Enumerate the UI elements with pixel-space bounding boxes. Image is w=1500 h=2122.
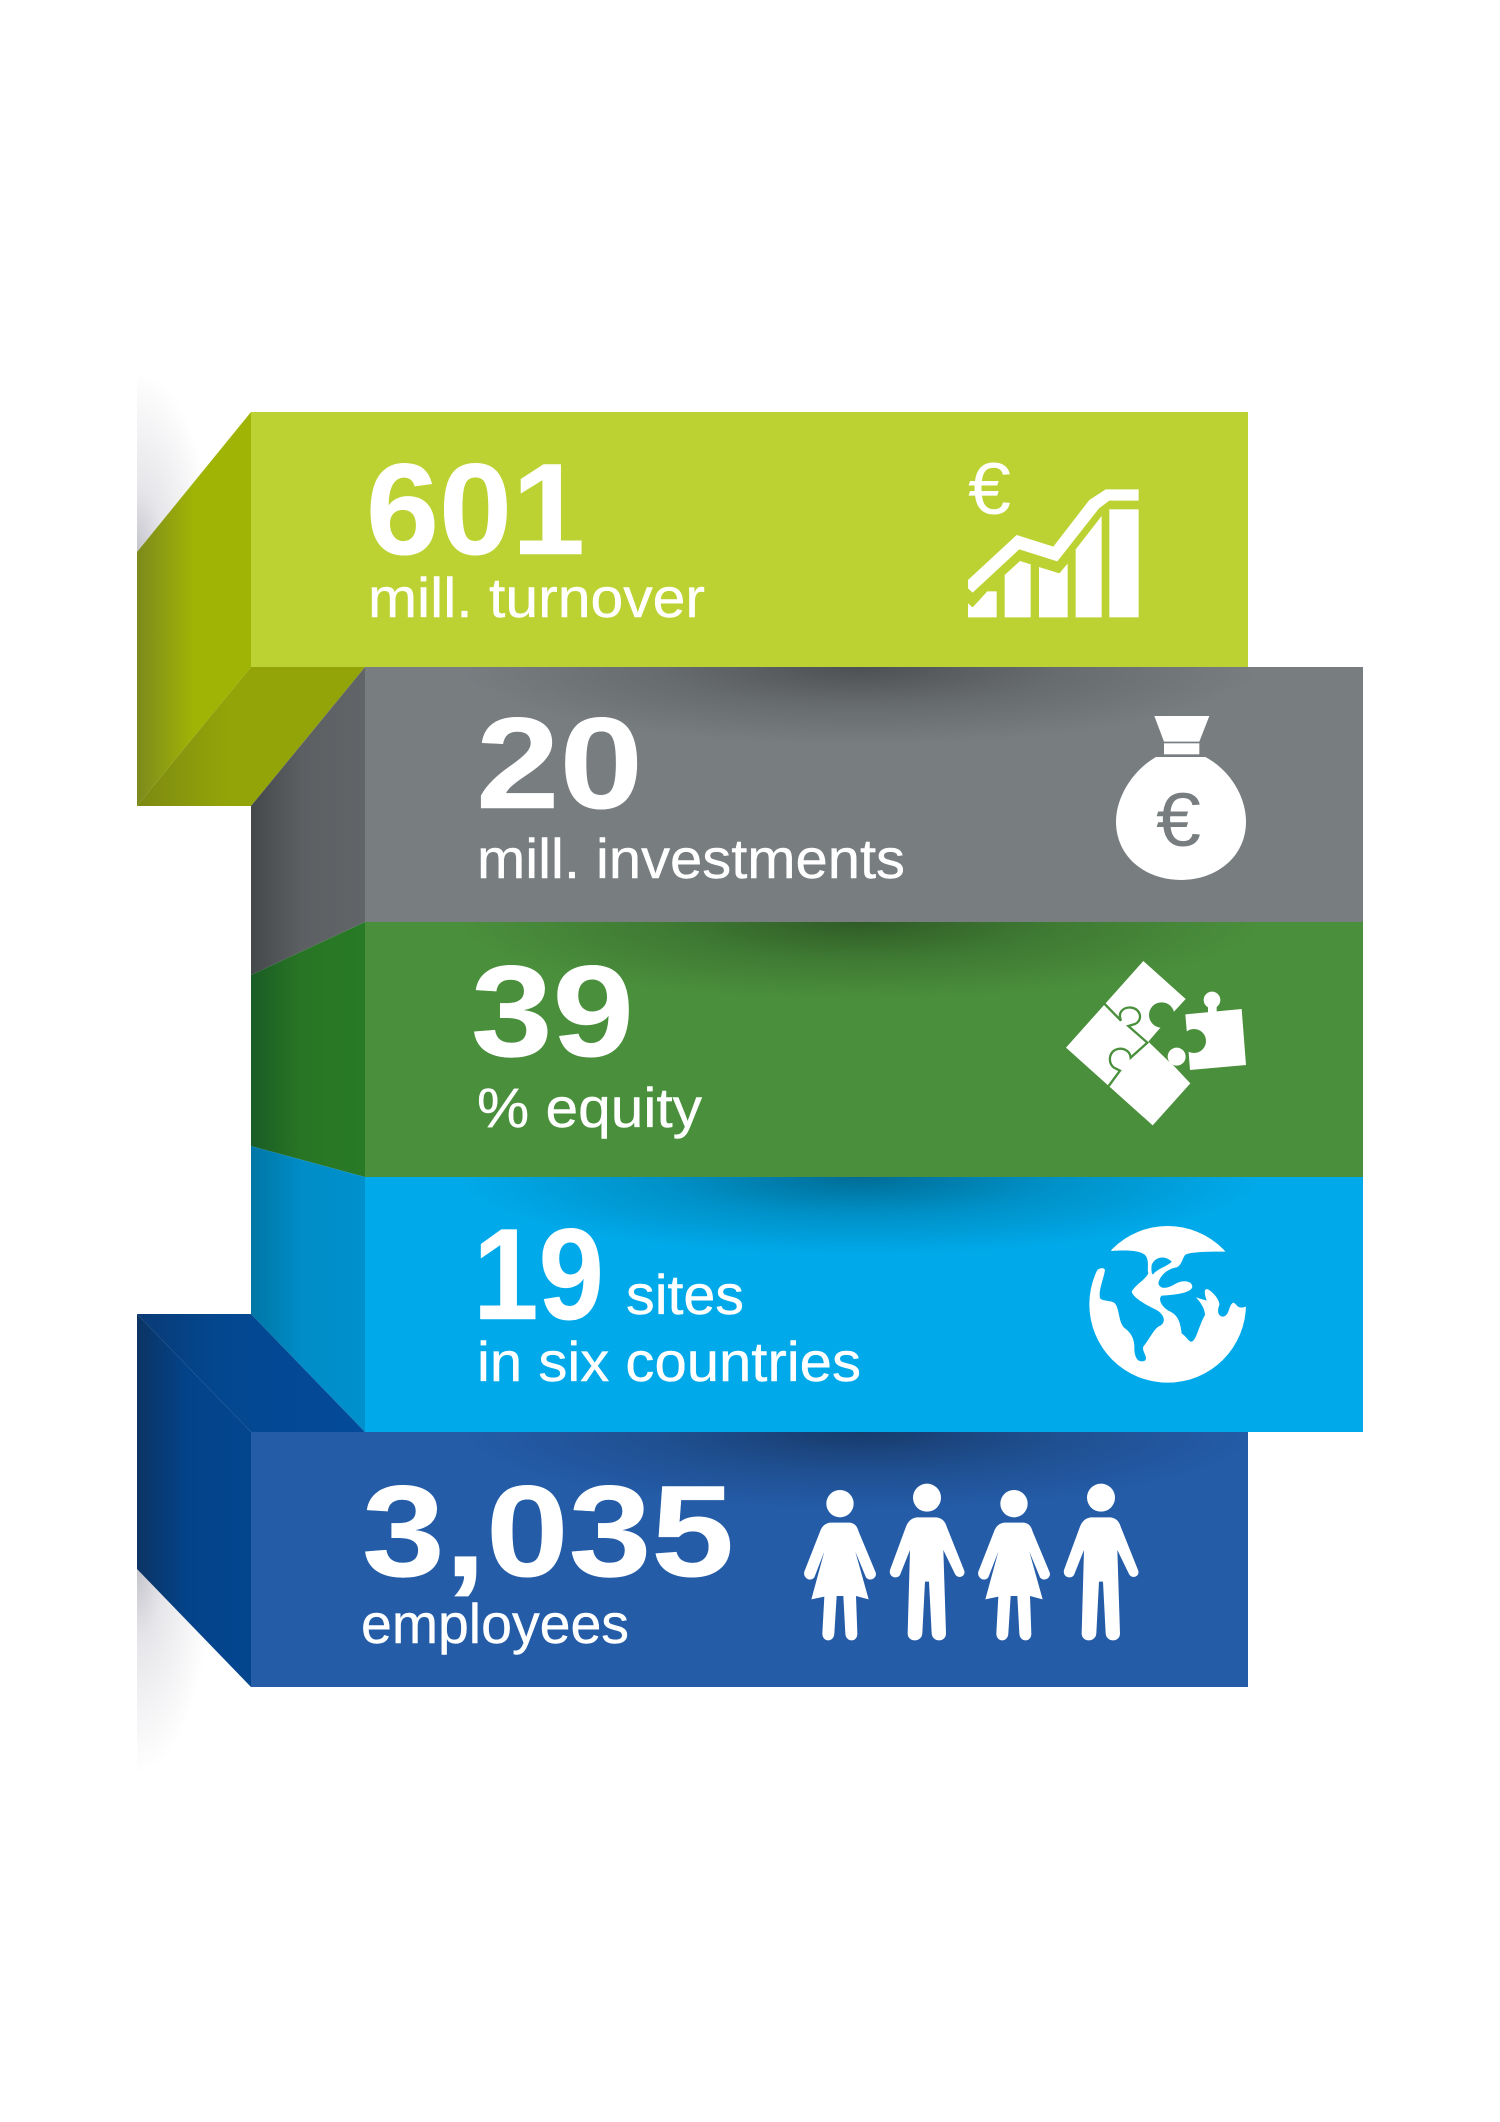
- number: 3,035: 3,035: [362, 1458, 734, 1604]
- number: 39: 39: [471, 938, 634, 1084]
- panel: investments: [251, 667, 1363, 975]
- icon: money bag: €: [1156, 778, 1201, 863]
- lime front face: [251, 412, 1248, 667]
- gray top shadow: [460, 667, 1260, 745]
- navy front face: [251, 1432, 1248, 1687]
- icon: puzzle pieces: [1066, 961, 1246, 1125]
- panel: sites: [251, 1146, 1363, 1432]
- green front face: [365, 922, 1363, 1177]
- panel: equity: [251, 922, 1363, 1177]
- label: in six countries: in six countries: [477, 1330, 861, 1393]
- label: mill. investments: mill. investments: [477, 827, 905, 890]
- number: 20: 20: [476, 690, 643, 836]
- number: 19: 19: [473, 1201, 604, 1347]
- icon: rising chart with euro: [968, 449, 1139, 617]
- gray front face: [365, 667, 1363, 922]
- label: sites: sites: [626, 1263, 744, 1326]
- blue left side face: [251, 1146, 365, 1432]
- icon: rising chart with euro: €: [968, 449, 1011, 530]
- icon: money bag: [1116, 716, 1246, 880]
- navy top shadow: [460, 1432, 1248, 1510]
- blue top shadow: [460, 1177, 1260, 1255]
- label: mill. turnover: mill. turnover: [368, 566, 705, 629]
- bottom soft shadow: [137, 1569, 251, 1775]
- number: 601: 601: [366, 436, 585, 582]
- lime underside face: [137, 667, 365, 806]
- label: employees: employees: [361, 1592, 629, 1655]
- navy left side face: [137, 1314, 251, 1687]
- panel: turnover: [137, 412, 1248, 806]
- label: % equity: % equity: [477, 1076, 702, 1139]
- icon: globe: [1087, 1226, 1253, 1383]
- navy top face: [137, 1314, 365, 1432]
- top soft shadow: [137, 372, 251, 552]
- gray left side face: [251, 667, 365, 975]
- green top shadow: [460, 922, 1260, 1000]
- panel: employees: [137, 1314, 1248, 1687]
- blue front face: [365, 1177, 1363, 1432]
- icon: four people: [804, 1484, 1139, 1640]
- lime left side face: [137, 412, 251, 806]
- green left side face: [251, 922, 365, 1177]
